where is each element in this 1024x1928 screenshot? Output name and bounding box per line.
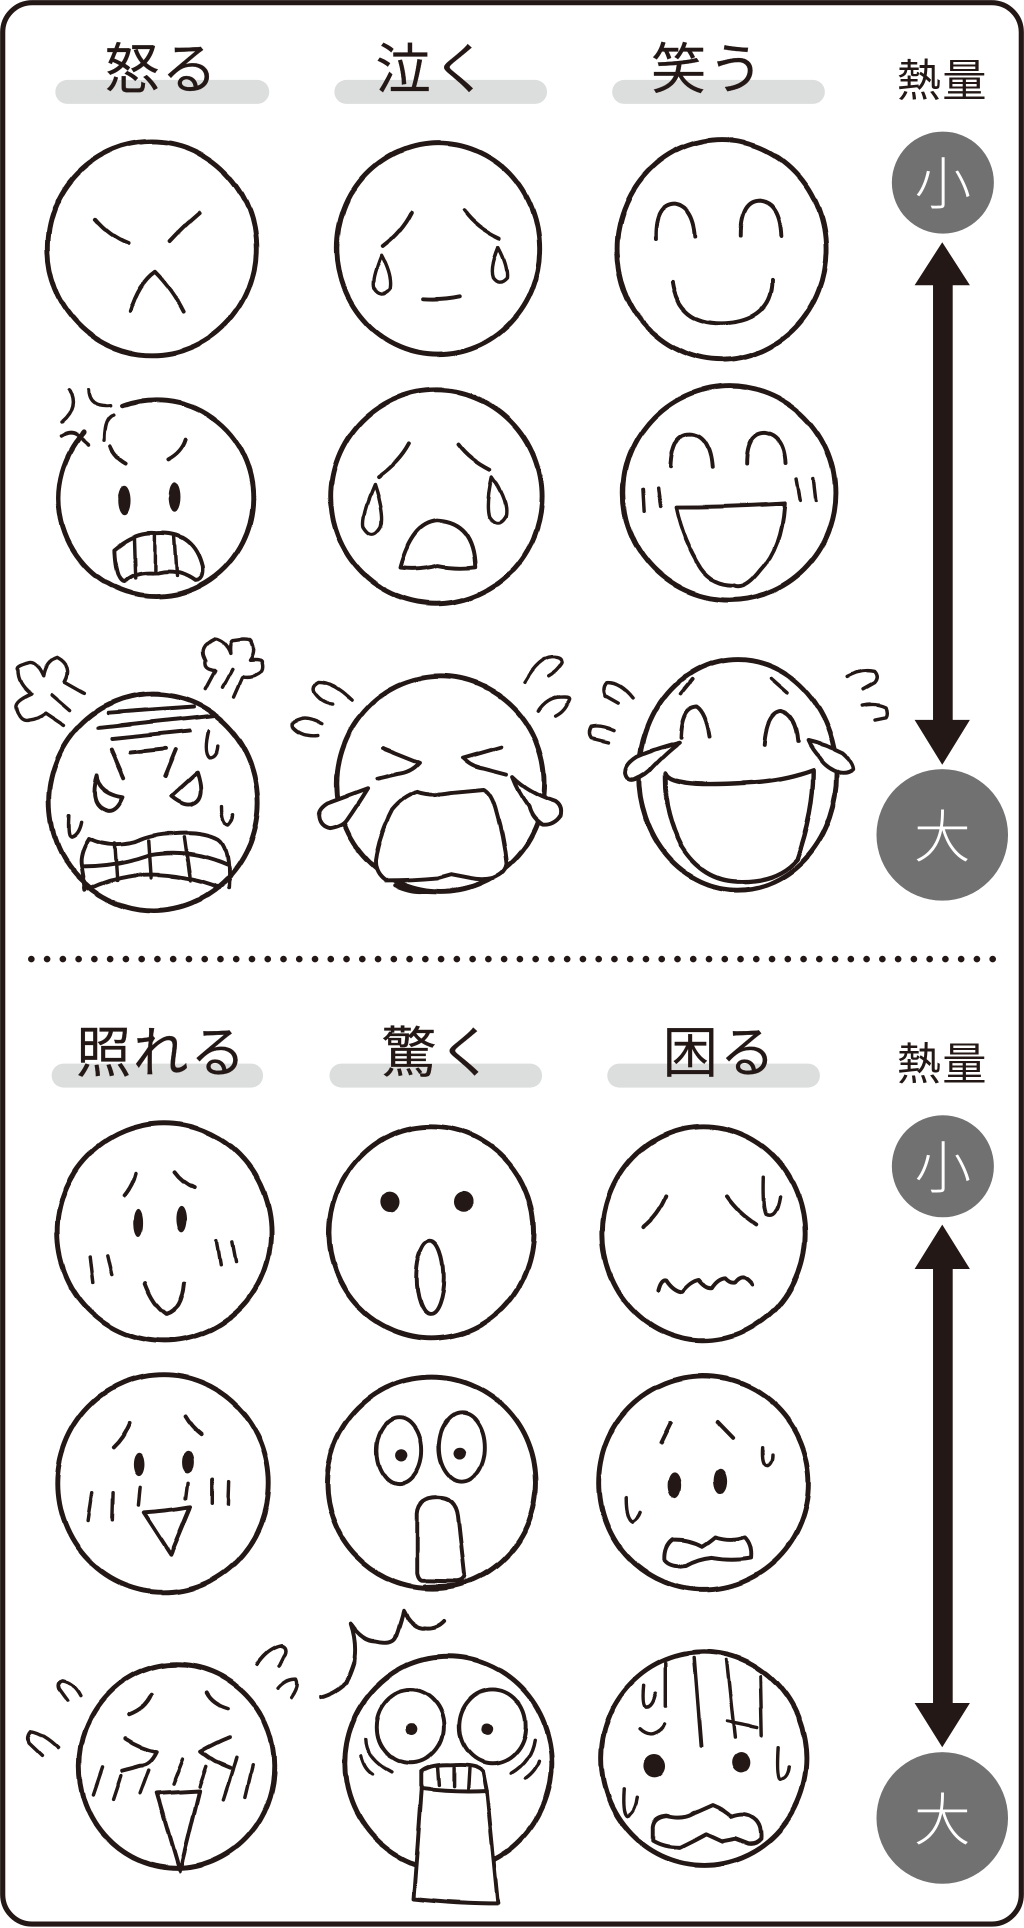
small circle: 小 [892, 1115, 994, 1217]
scale: upper heat meter [876, 57, 1008, 901]
face: laugh medium [623, 386, 836, 600]
heading: 驚く [329, 1022, 542, 1088]
large circle: 大: 大 [914, 806, 971, 869]
face: surprise large [320, 1611, 552, 1903]
face: anger large [16, 638, 262, 911]
face: troubled medium [599, 1376, 809, 1590]
double arrow [915, 242, 970, 765]
face: troubled small [602, 1126, 805, 1340]
heading: 怒る [55, 39, 269, 104]
panel: lower emotions [29, 1022, 820, 1903]
heading: 困る [607, 1022, 820, 1088]
face: anger small [47, 141, 256, 355]
heading: 照れる: 照れる [76, 1022, 247, 1084]
face: surprise medium [327, 1377, 536, 1589]
face: shy small [57, 1123, 271, 1341]
small circle: 小: 小 [915, 153, 971, 216]
label: 熱量: 熱量 [897, 57, 988, 106]
face: troubled large [601, 1652, 806, 1865]
heading: 困る: 困る [663, 1022, 777, 1084]
face: cry medium [331, 390, 542, 604]
face: anger medium [59, 390, 253, 597]
heading: 笑う [612, 39, 825, 104]
heading: 泣く: 泣く [376, 39, 490, 101]
large circle: 大: 大 [914, 1789, 971, 1852]
small circle: 小: 小 [915, 1137, 971, 1200]
small circle: 小 [892, 132, 994, 234]
heading: 驚く: 驚く [381, 1022, 495, 1084]
double arrow [915, 1225, 970, 1747]
face: shy large [29, 1645, 296, 1871]
panel: upper emotions [16, 39, 886, 911]
face: cry large [292, 657, 570, 892]
heading: 怒る: 怒る [104, 39, 219, 101]
heading: 笑う: 笑う [651, 39, 765, 101]
face: surprise small [329, 1126, 534, 1338]
face: laugh small [617, 140, 826, 360]
heading: 泣く [334, 39, 547, 104]
scale: lower heat meter [876, 1041, 1008, 1884]
face: shy medium [58, 1375, 269, 1592]
face: cry small [337, 143, 540, 354]
face: laugh large [589, 659, 886, 890]
large circle: 大 [876, 1752, 1008, 1884]
large circle: 大 [876, 769, 1008, 901]
section divider dotted line [31, 956, 996, 962]
label: 熱量: 熱量 [897, 1041, 988, 1090]
